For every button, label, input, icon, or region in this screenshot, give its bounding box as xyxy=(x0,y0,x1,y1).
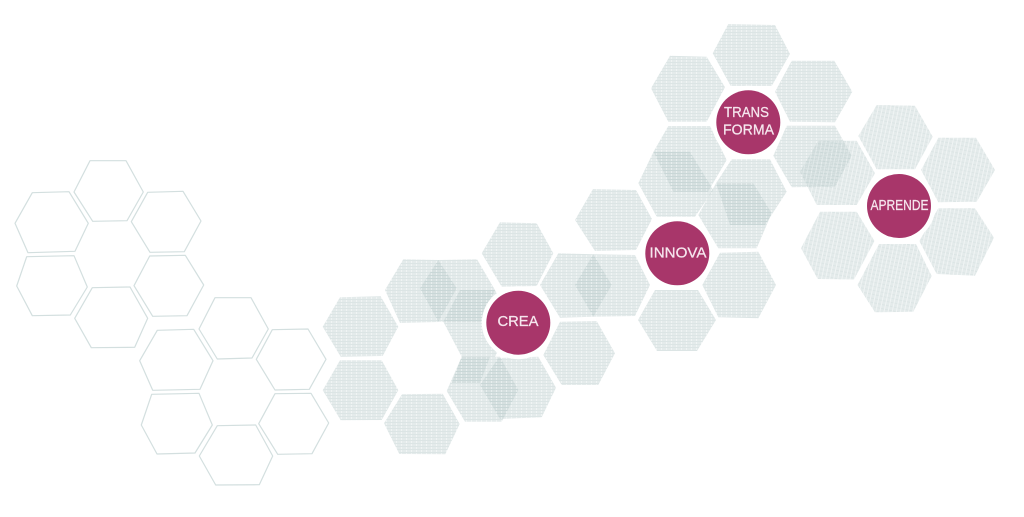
textured hexagon cluster: innova xyxy=(540,189,776,351)
badge: aprende xyxy=(862,170,936,242)
badge: transforma xyxy=(712,86,785,159)
outline hexagon cluster: upper left xyxy=(15,161,204,348)
outline hexagon cluster: lower left xyxy=(140,298,329,485)
badge: innova xyxy=(641,217,714,290)
textured hexagon cluster: transforma xyxy=(638,24,852,248)
badge: transforma: TRANS xyxy=(724,105,769,121)
textured hexagon cluster: aprende xyxy=(800,105,995,312)
badge: crea xyxy=(482,286,555,359)
badge: crea: CREA xyxy=(498,314,539,330)
textured hexagon cluster: crea xyxy=(323,222,615,454)
badge: transforma: FORMA xyxy=(723,122,774,138)
badge: aprende: APRENDE xyxy=(870,198,929,214)
badge: innova: INNOVA xyxy=(650,246,707,262)
